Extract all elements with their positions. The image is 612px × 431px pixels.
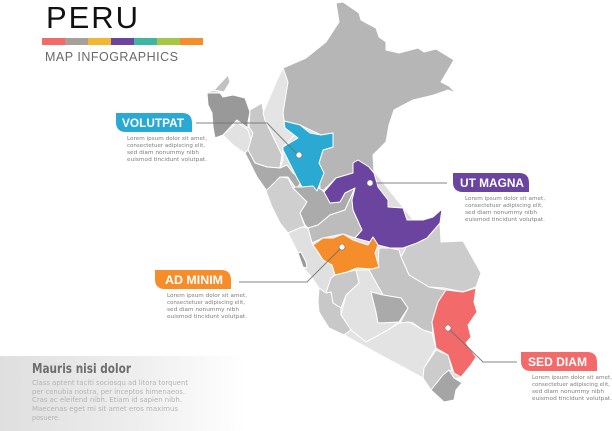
region: coast light <box>223 122 253 153</box>
panel body text: posuere. <box>32 413 60 422</box>
region: highlighted orange <box>313 234 379 275</box>
region: south east <box>401 223 481 292</box>
region: northwest dark <box>207 93 250 138</box>
callout: ad minim: sed diam nonummy nibh <box>167 307 239 313</box>
callout: sed diam: sed diam nonummy nibh <box>532 389 604 395</box>
subtitle: MAP INFOGRAPHICS <box>45 50 178 64</box>
map base silhouette <box>207 68 481 402</box>
region: central grey <box>293 185 355 228</box>
callout: ad minim: AD MINIM <box>165 273 223 287</box>
region: central highland <box>308 188 362 243</box>
callout: volutpat <box>116 113 207 163</box>
region: northwest tip <box>214 75 230 92</box>
region: north <box>283 2 456 190</box>
callout: ut magna: UT MAGNA <box>460 176 524 190</box>
leader lines <box>196 123 517 362</box>
region: far south <box>423 350 452 390</box>
panel heading: Mauris nisi dolor <box>32 362 131 377</box>
callout: ut magna: euismod tincidunt volutpat. <box>465 217 545 223</box>
callout: sed diam <box>521 352 612 402</box>
region: north coast dark <box>245 150 302 191</box>
region: small coast <box>298 252 307 268</box>
region: central coast <box>266 177 307 233</box>
panel body text: per conubia nostra, per inceptos himenaeos. <box>32 387 185 396</box>
panel body text: Class aptent taciti sociosqu ad litora torquent <box>32 378 188 387</box>
callout: ad minim: euismod tincidunt volutpat. <box>167 314 247 320</box>
callout: volutpat: euismod tincidunt volutpat. <box>127 157 207 163</box>
callout: volutpat: VOLUTPAT <box>122 116 185 130</box>
region: southern coast light <box>344 322 436 378</box>
map markers <box>296 152 451 331</box>
callout: ut magna <box>453 173 545 223</box>
region: highlighted blue <box>283 121 333 191</box>
map of Peru <box>207 2 481 402</box>
callout: volutpat: sed diam nonummy nibh <box>127 150 199 156</box>
region: north highland <box>248 103 282 168</box>
region: lima <box>288 227 335 293</box>
region: inner dark <box>371 292 408 323</box>
region: southern tip <box>431 370 462 402</box>
region: northern strip <box>263 68 295 168</box>
callout: sed diam: euismod tincidunt volutpat. <box>532 396 612 402</box>
callout: ad minim: Lorem ipsum dolor sit amet, <box>167 293 247 299</box>
region: highlighted purple <box>324 160 442 248</box>
panel body text: Maecenas eget mi sit amet eros maximus <box>32 404 178 413</box>
region: highlighted red <box>432 288 477 377</box>
callout: ut magna: consectetuer adipiscing elit, <box>465 203 543 209</box>
panel body text: Cras ac eleifend nibh. Etiam id sapien nibh. <box>32 395 182 404</box>
title: PERU <box>46 0 138 35</box>
callout: volutpat: Lorem ipsum dolor sit amet, <box>127 136 207 142</box>
callout: ut magna: sed diam nonummy nibh <box>465 210 537 216</box>
callout: volutpat: consectetuer adipiscing elit, <box>127 143 205 149</box>
region: south coast <box>318 288 351 335</box>
callout: ad minim <box>155 270 247 320</box>
callout: ut magna: Lorem ipsum dolor sit amet, <box>465 196 545 202</box>
colour bar <box>42 38 203 45</box>
region: south highland light <box>341 270 399 342</box>
region: south central <box>369 248 446 333</box>
bottom text panel <box>0 356 245 431</box>
callout: sed diam: SED DIAM <box>528 355 587 369</box>
callout: sed diam: Lorem ipsum dolor sit amet, <box>532 375 612 381</box>
panel body text <box>32 378 188 422</box>
callout: ad minim: consectetuer adipiscing elit, <box>167 300 245 306</box>
region: highland small <box>326 270 359 308</box>
callout: sed diam: consectetuer adipiscing elit, <box>532 382 610 388</box>
